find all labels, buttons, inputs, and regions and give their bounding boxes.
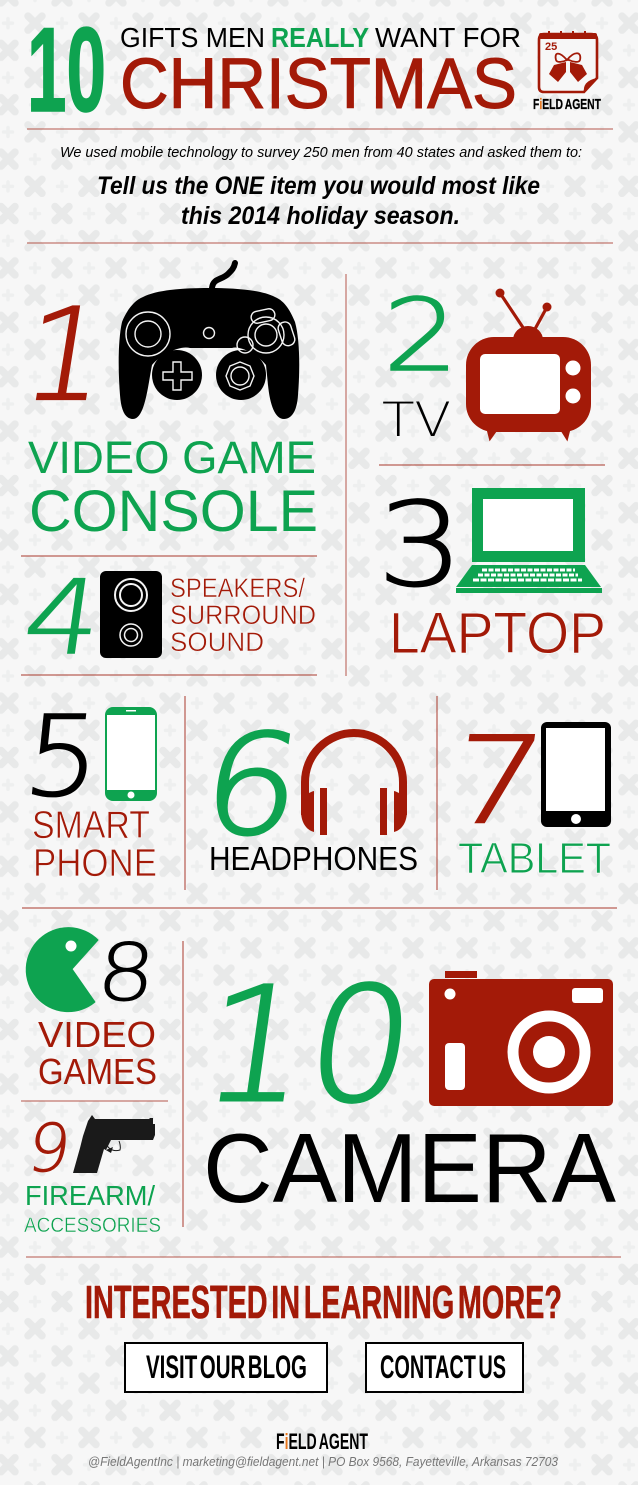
title line: gifts men really want for: GIFTS MEN [120, 22, 265, 53]
icon: handgun [73, 1115, 155, 1173]
panel: rank 2 tv [382, 277, 591, 448]
icon: laptop [456, 488, 602, 593]
number 6: 6 [193, 705, 311, 866]
button: visit our blog [125, 1343, 327, 1392]
icon: camera [429, 971, 613, 1106]
number 9: 9 [23, 1109, 76, 1187]
number 5: 5 [18, 693, 107, 822]
label: video games [38, 1014, 157, 1092]
panel: rank 4 speakers [17, 559, 316, 678]
title line: gifts men really want for: REALLY [271, 22, 369, 53]
icon: speaker [100, 571, 162, 658]
number 7: 7 [443, 713, 552, 851]
panel: rank 6 headphones [193, 705, 418, 877]
panel: rank 5 smart phone [18, 693, 157, 885]
number 3: 3 [377, 478, 464, 613]
panel: rank 1 video game console [13, 263, 318, 544]
label: smart phone [32, 804, 157, 885]
icon: game controller [119, 263, 299, 419]
label: console: CONSOLE [29, 479, 318, 544]
button: contact us: CONTACT US [380, 1349, 506, 1385]
label: speakers surround sound: SPEAKERS/ [170, 573, 305, 603]
logo: field agent footer: FiELD AGENT [276, 1429, 368, 1454]
logo: field agent top: FiELD AGENT [533, 96, 601, 113]
label: headphones: HEADPHONES [209, 840, 418, 877]
label: laptop: LAPTOP [389, 601, 606, 666]
title word: christmas: CHRISTMAS [120, 45, 517, 124]
title [27, 3, 521, 137]
icon: headphones [301, 733, 407, 835]
label: tablet: TABLET [458, 834, 611, 883]
icon: smartphone [105, 707, 157, 801]
label: accessories: ACCESSORIES [24, 1214, 161, 1237]
icon: pacman [26, 928, 98, 1012]
panel: rank 8 video games [26, 927, 159, 1092]
icon: calendar with bells [539, 31, 597, 93]
title line: gifts men really want for: WANT FOR [375, 22, 521, 53]
footer contact line: @FieldAgentInc | marketing@fieldagent.net | PO Box 9568, Fayetteville, Arkansas 72703 [88, 1455, 558, 1469]
label: firearm: FIREARM/ [25, 1180, 155, 1211]
panel: rank 3 laptop [377, 478, 606, 666]
number 1: 1 [13, 282, 119, 430]
label: tv: TV [382, 393, 451, 448]
number 2: 2 [383, 277, 459, 394]
label: video games: VIDEO [38, 1014, 156, 1055]
icon: calendar with bells: 25 [545, 41, 557, 53]
icon: tablet [541, 722, 611, 827]
number 8: 8 [93, 927, 159, 1019]
label: video games: GAMES [38, 1051, 157, 1092]
label: speakers surround sound: SURROUND [170, 600, 316, 630]
panel: rank 9 firearm [23, 1109, 161, 1237]
label: speakers surround sound [170, 573, 316, 657]
survey question [97, 172, 540, 230]
survey question: Tell us the ONE item you would most like [97, 172, 540, 200]
number 4: 4 [17, 559, 109, 678]
intro text: We used mobile technology to survey 250 men from 40 states and asked them to: [60, 144, 582, 161]
button: contact us [366, 1343, 523, 1392]
label: camera: CAMERA [203, 1113, 617, 1223]
label: smart phone: PHONE [33, 842, 157, 885]
icon: television [466, 288, 591, 439]
title line: gifts men really want for [120, 22, 521, 53]
number 10: 10 [192, 955, 425, 1138]
label: video game: VIDEO GAME [28, 432, 316, 483]
label: smart phone: SMART [32, 804, 150, 847]
panel: rank 10 camera [192, 955, 617, 1223]
panel: rank 7 tablet [443, 713, 611, 883]
survey question: this 2014 holiday season. [181, 202, 460, 230]
button: visit our blog: VISIT OUR BLOG [146, 1349, 307, 1385]
label: speakers surround sound: SOUND [170, 627, 264, 657]
title number 10: 10 [27, 3, 106, 137]
